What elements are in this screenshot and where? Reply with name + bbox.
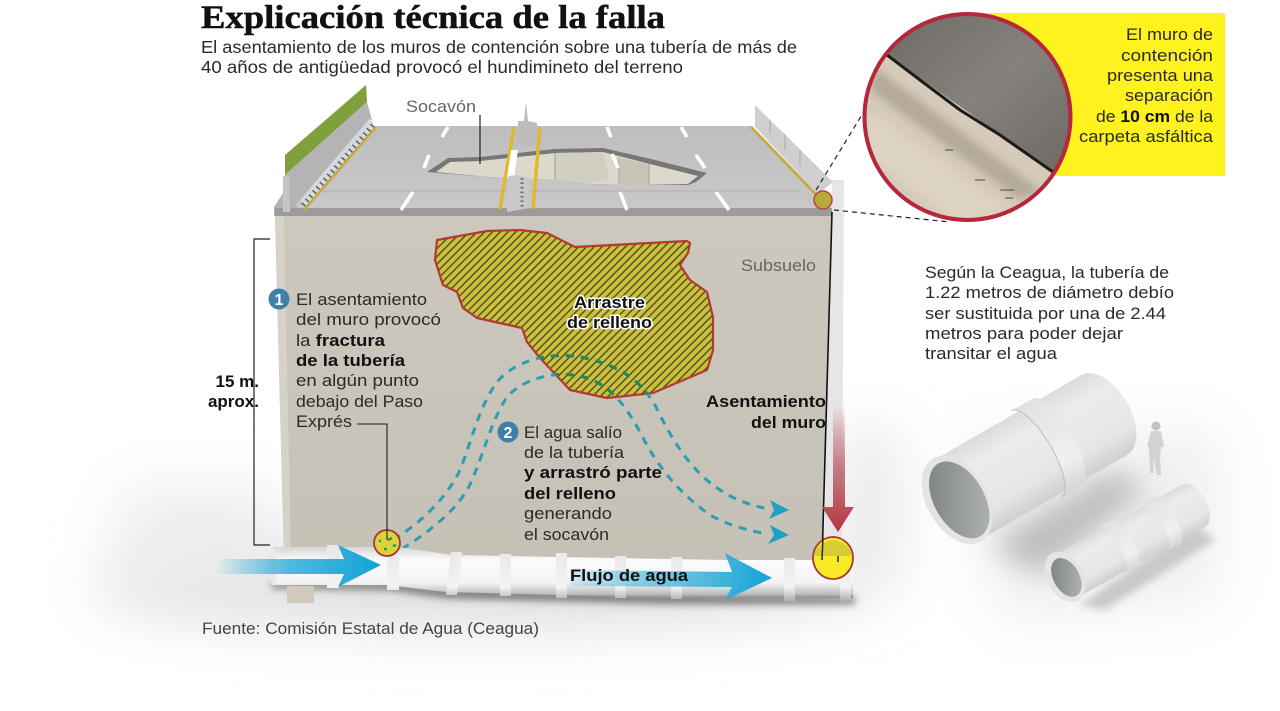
subtitle xyxy=(201,37,797,77)
explanation text: 1.22 metros de diámetro debío xyxy=(925,283,1174,302)
pipe with collars xyxy=(269,543,853,602)
left ledge xyxy=(274,193,300,216)
step 1 text: El asentamiento xyxy=(296,290,427,309)
ground shadow xyxy=(90,430,1220,625)
pipe shadow xyxy=(272,582,855,604)
source: Fuente: Comisión Estatal de Agua (Ceagua) xyxy=(202,619,539,638)
step 2 text: de la tubería xyxy=(524,443,625,462)
subsuelo label: Subsuelo xyxy=(741,256,816,275)
socavon label xyxy=(406,97,480,164)
right side strip xyxy=(824,180,844,548)
settlement label xyxy=(706,392,826,432)
step 2 text: y arrastró parte xyxy=(524,463,662,482)
detail photo of the wall gap xyxy=(860,10,1080,225)
step 1 badge: 1 xyxy=(275,292,284,309)
callout box: contención xyxy=(1121,46,1213,65)
callout box: carpeta asfáltica xyxy=(1079,127,1214,146)
panel: cross-section block xyxy=(274,85,844,562)
depth label xyxy=(208,372,259,411)
road yellow edge lines xyxy=(304,127,820,210)
socavon label: Socavón xyxy=(406,97,476,116)
settlement marker xyxy=(813,537,853,579)
step 1 text: de la tubería xyxy=(296,351,406,370)
step 2 text: el socavón xyxy=(524,525,609,544)
lane dashes xyxy=(401,127,729,210)
subsoil face xyxy=(275,216,832,562)
median barrier back xyxy=(517,102,537,147)
dashed zoom leaders xyxy=(816,82,950,222)
median barrier front xyxy=(507,175,529,212)
settlement line and arrow xyxy=(822,212,854,562)
step 1 badge xyxy=(268,288,290,310)
subtitle: 40 años de antigüedad provocó el hundimineto del terreno xyxy=(201,57,683,77)
step 1 text xyxy=(296,290,441,431)
step 1 text: debajo del Paso xyxy=(296,392,423,411)
small pipe xyxy=(1036,476,1218,610)
right wall xyxy=(755,105,833,194)
step 1 text: del muro provocó xyxy=(296,310,441,329)
step 1 text: Exprés xyxy=(296,412,352,431)
dashed water flow paths xyxy=(393,356,768,549)
flow arrow: flujo de agua: Flujo de agua xyxy=(570,566,689,585)
support stub xyxy=(287,586,314,603)
title: Explicación técnica de la falla xyxy=(201,0,665,36)
arrastre de relleno hatched area: de relleno xyxy=(567,313,652,332)
step 1 text: la fractura xyxy=(296,331,386,350)
explanation text xyxy=(925,263,1174,363)
pipe shadows xyxy=(990,470,1145,575)
callout box: El muro de xyxy=(1126,25,1213,44)
road slab edge xyxy=(275,208,832,216)
subtitle: El asentamiento de los muros de contención sobre una tubería de más de xyxy=(201,37,797,57)
callout box: separación xyxy=(1125,86,1213,105)
step 2 text: generando xyxy=(524,504,612,523)
left barrier with green strip xyxy=(283,85,375,212)
step 2 badge xyxy=(498,422,518,442)
callout box xyxy=(985,13,1225,176)
settlement label: Asentamiento xyxy=(706,392,826,411)
road surface xyxy=(284,126,832,208)
flow arrow: inlet xyxy=(215,545,381,587)
settlement label: del muro xyxy=(751,413,826,432)
explanation text: transitar el agua xyxy=(925,344,1058,363)
callout box: de 10 cm de la xyxy=(1096,107,1214,126)
step 2 text: El agua salío xyxy=(524,423,622,442)
large pipe xyxy=(906,359,1152,558)
flow arrowheads xyxy=(768,500,789,544)
explanation text: ser sustituida por una de 2.44 xyxy=(925,304,1166,323)
small gap marker xyxy=(814,191,832,209)
step 2 text xyxy=(524,423,662,544)
depth bracket xyxy=(254,239,270,545)
leader from step 1 to fracture xyxy=(357,424,387,540)
median yellow lines xyxy=(500,127,540,209)
median stripe xyxy=(507,150,518,178)
icon: human scale figure xyxy=(1147,422,1164,475)
flow arrow: flujo de agua xyxy=(570,553,772,600)
road seam xyxy=(312,190,800,192)
depth label: aprox. xyxy=(208,392,259,411)
arrastre de relleno hatched area xyxy=(435,230,713,398)
depth label: 15 m. xyxy=(216,372,259,391)
fracture marker xyxy=(374,530,400,556)
callout box: presenta una xyxy=(1107,66,1214,85)
step 2 badge: 2 xyxy=(504,425,513,442)
sinkhole xyxy=(427,148,707,185)
explanation text: metros para poder dejar xyxy=(925,324,1123,343)
step 1 text: en algún punto xyxy=(296,371,419,390)
explanation text: Según la Ceagua, la tubería de xyxy=(925,263,1169,282)
step 2 text: del relleno xyxy=(524,484,616,503)
arrastre de relleno hatched area: Arrastre xyxy=(574,293,645,312)
